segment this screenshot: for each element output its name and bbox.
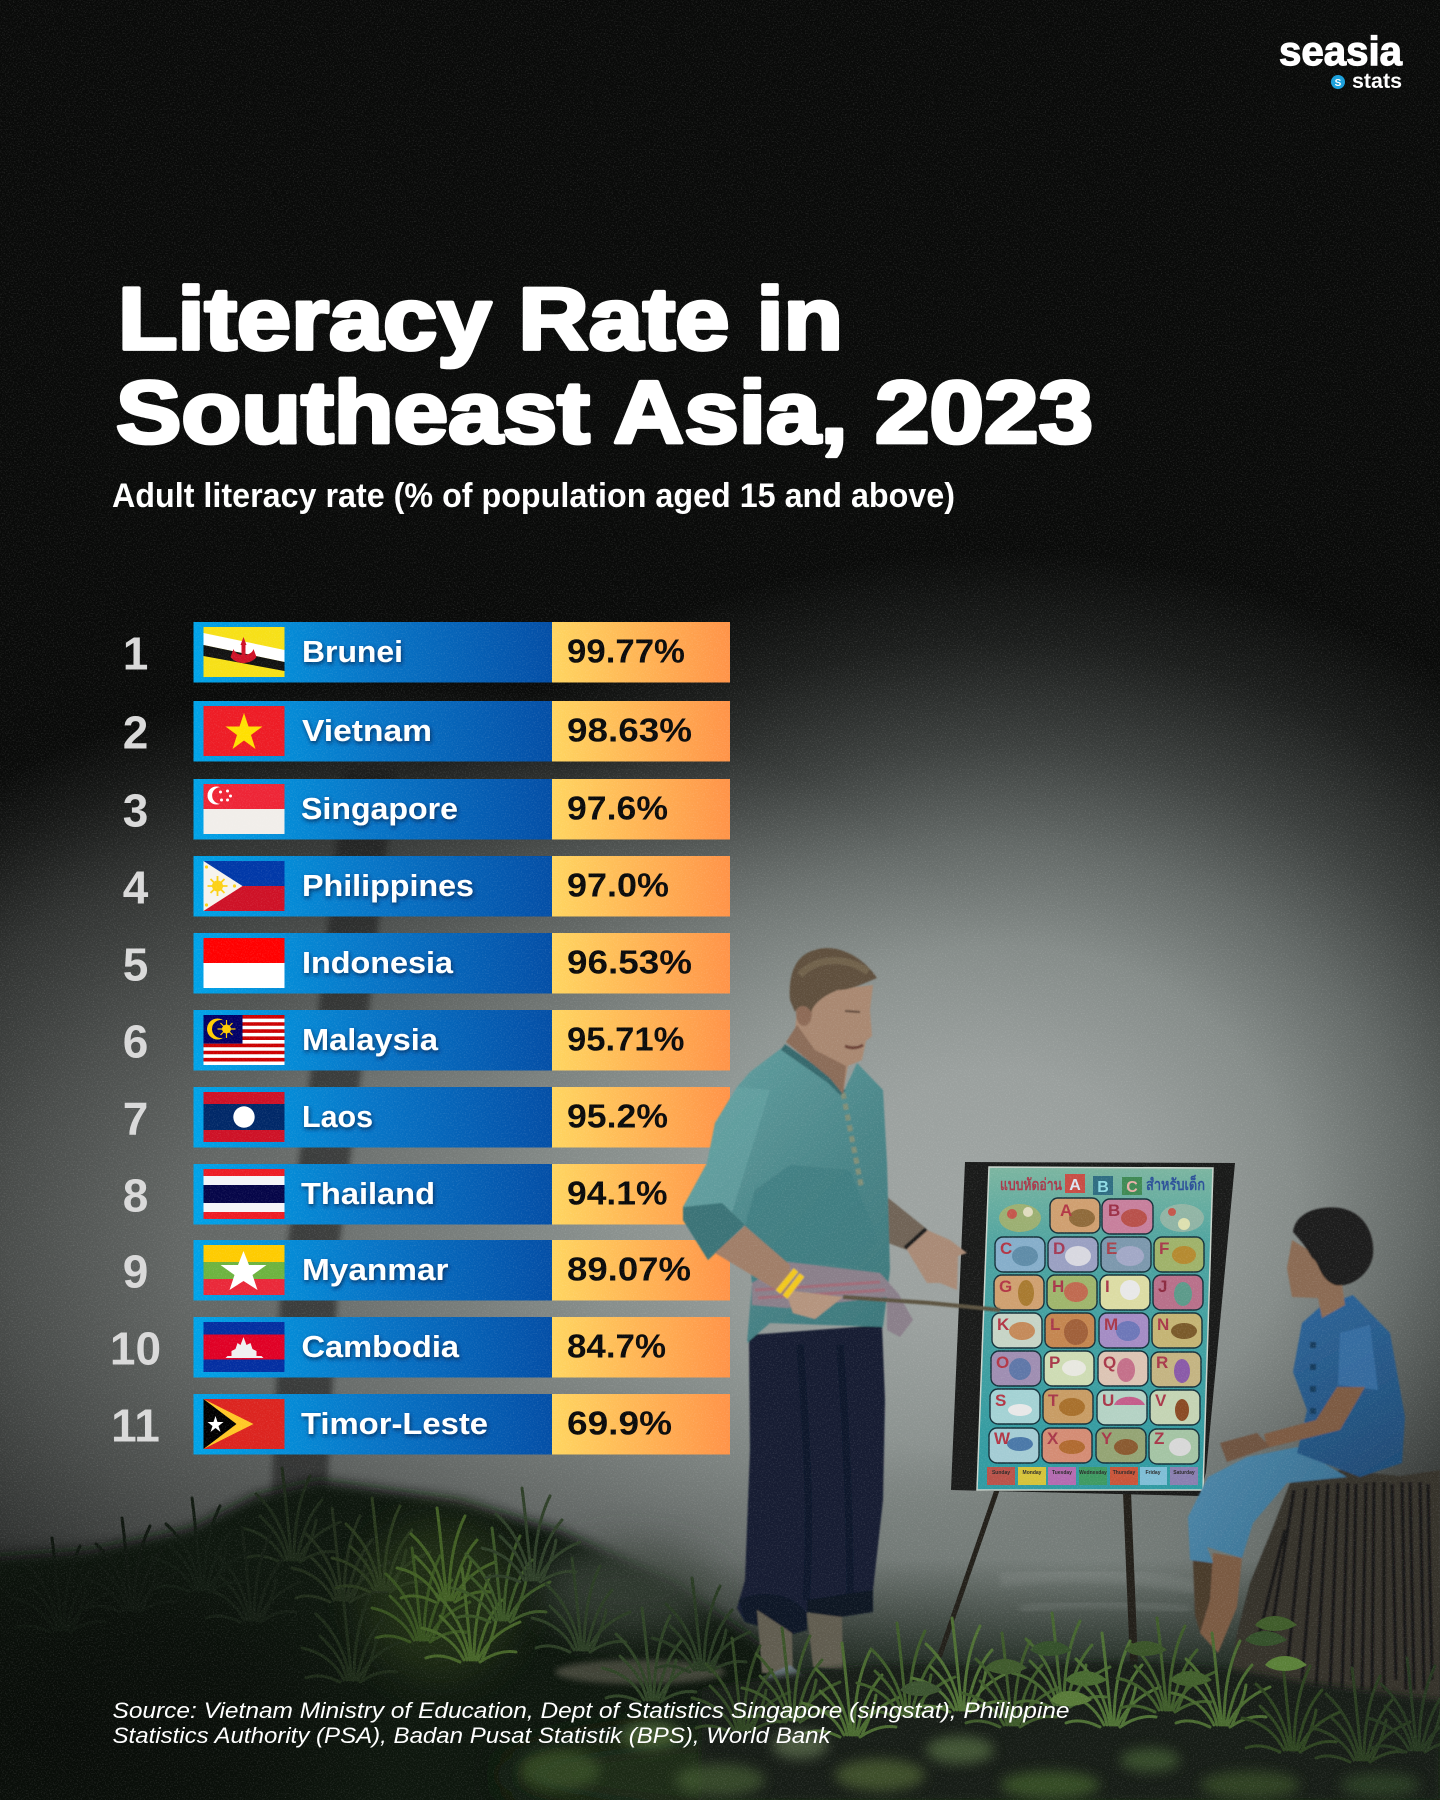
rank 5: Indonesia: Indonesia [302,945,454,980]
letter cards: J [1158,1277,1167,1296]
weekday strip: Friday [1145,1470,1161,1476]
rank 11: Timor-Leste: 11 [111,1400,160,1452]
rank 1: Brunei: Brunei [302,634,403,669]
jeans [1188,1447,1347,1563]
legs and shoes [757,1610,843,1673]
rank 8: Thailand [123,1164,730,1224]
letter cards: X [1047,1429,1059,1448]
ranking table [110,622,730,1454]
board heading: C [1126,1179,1138,1196]
rank 5: Indonesia: 5 [123,938,148,990]
near forearm and fist [715,1226,790,1298]
source note: Source: Vietnam Ministry of Education, Dept of Statistics Singapore (singstat), Philippine [112,1698,1070,1723]
background grass behind figures [12,1468,750,1702]
alphabet board [951,1162,1235,1496]
easel legs [940,1490,1134,1665]
letter cards: R [1156,1353,1168,1372]
rank 5: Indonesia [123,933,730,994]
pointing stick [843,1297,1000,1310]
rank 7: Laos: Laos [302,1099,373,1134]
rank 6: Malaysia: 6 [123,1016,148,1068]
letter cards: M [1104,1315,1118,1334]
board heading: B [1097,1179,1109,1196]
rank 8: Thailand: Thailand [301,1176,435,1211]
rank 4: Philippines: 4 [123,862,149,914]
letter cards: K [997,1315,1010,1334]
letter cards: H [1052,1277,1064,1296]
rank 3: Singapore [123,779,730,840]
rank 7: Laos: 7 [123,1092,148,1144]
rank 9: Myanmar [123,1240,730,1300]
letter cards: Z [1154,1429,1164,1448]
rank 1: Brunei: 99.77% [567,632,685,670]
letter cards: U [1102,1391,1114,1410]
letter cards: S [995,1391,1006,1410]
board heading: แบบหัดอ่าน [1000,1176,1062,1194]
letter cards: P [1049,1353,1060,1372]
rank 6: Malaysia [123,1010,730,1070]
rank 6: Malaysia: Malaysia [302,1022,439,1057]
subtitle: Adult literacy rate (% of population aged 15 and above) [112,477,955,515]
rank 10: Cambodia [110,1317,730,1378]
shirt [1293,1295,1405,1477]
rank 11: Timor-Leste: 69.9% [567,1404,672,1442]
letter cards: F [1159,1239,1169,1258]
rank 9: Myanmar: 9 [123,1246,148,1298]
rank 5: Indonesia: 96.53% [567,944,692,980]
letter cards: N [1157,1315,1169,1334]
rank 4: Philippines [123,856,730,916]
letter cards: Y [1101,1429,1113,1448]
rank 9: Myanmar: Myanmar [302,1252,448,1287]
letter cards: W [994,1429,1011,1448]
letter cards: O [996,1353,1009,1372]
rank 1: Brunei [123,622,730,682]
rank 2: Vietnam [123,701,730,762]
letter cards [989,1198,1204,1464]
rank 11: Timor-Leste [111,1394,730,1454]
letter cards: A [1060,1201,1072,1220]
weekday strip [987,1467,1198,1485]
rank 6: Malaysia: 95.71% [567,1020,684,1058]
rank 2: Vietnam: 2 [123,706,148,758]
rank 4: Philippines: 97.0% [567,866,669,904]
rank 2: Vietnam: Vietnam [302,713,432,748]
rank 9: Myanmar: 89.07% [567,1250,691,1288]
rank 11: Timor-Leste: Timor-Leste [301,1406,488,1441]
back leg [1193,1560,1213,1633]
rank 2: Vietnam: 98.63% [567,712,692,748]
letter cards: E [1106,1239,1117,1258]
logo: seasia stats: stats [1352,70,1402,93]
head [1287,1240,1345,1318]
letter cards: I [1105,1277,1110,1296]
logo: seasia stats: seasia [1279,28,1403,74]
source note [112,1698,1070,1748]
tree stump [1225,1470,1440,1710]
weekday strip: Tuesday [1052,1470,1072,1476]
teacher [683,948,1000,1703]
arm and hands [1264,1387,1365,1448]
weekday strip: Saturday [1173,1470,1195,1476]
child on stump [1188,1207,1440,1710]
rank 10: Cambodia: Cambodia [302,1329,460,1364]
letter cards: L [1050,1315,1060,1334]
weekday strip: Thursday [1113,1470,1135,1476]
far arm and hand [887,1197,930,1250]
board corner pictures [999,1204,1204,1232]
letter cards: V [1155,1391,1167,1410]
letter cards: B [1108,1201,1120,1220]
front leg [1200,1553,1242,1653]
rank 1: Brunei: 1 [123,628,148,680]
rank 10: Cambodia: 84.7% [567,1328,666,1364]
letter cards: G [999,1277,1012,1296]
rank 7: Laos [123,1087,730,1148]
rank 8: Thailand: 8 [123,1170,148,1222]
weekday strip: Sunday [992,1470,1010,1476]
rank 8: Thailand: 94.1% [567,1174,668,1212]
weekday strip: Wednesday [1079,1470,1107,1476]
rank 10: Cambodia: 10 [110,1322,161,1374]
rank 7: Laos: 95.2% [567,1098,668,1134]
head and neck [786,985,873,1094]
letter cards: T [1048,1391,1059,1410]
rank 3: Singapore: 97.6% [567,790,668,826]
rank 3: Singapore: Singapore [301,791,458,826]
title: Literacy Rate in [118,269,843,368]
source note: Statistics Authority (PSA), Badan Pusat Statistik (BPS), World Bank [112,1723,832,1748]
sash [752,1262,913,1337]
weekday strip: Monday [1023,1470,1042,1476]
letter cards: D [1053,1239,1065,1258]
shirt [683,1047,890,1343]
board heading [1000,1173,1205,1196]
letter cards: C [1000,1239,1012,1258]
board heading: สำหรับเด็ก [1146,1173,1205,1194]
trousers [737,1325,885,1635]
title: Southeast Asia, 2023 [116,362,1093,462]
foreground grass and leaves [500,1613,1440,1800]
logo: seasia stats: S [1335,78,1342,89]
rank 4: Philippines: Philippines [302,868,474,903]
letter cards: Q [1103,1353,1116,1372]
board heading: A [1069,1177,1081,1194]
title [116,269,1093,462]
rank 3: Singapore: 3 [123,784,148,836]
